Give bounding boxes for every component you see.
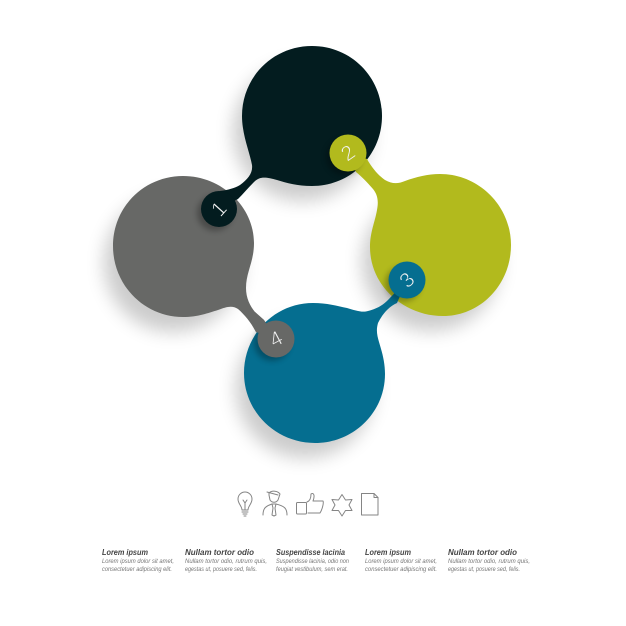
text block 3: Suspendisse lacinia, odio non [276, 559, 350, 565]
text block 4: Lorem ipsum [365, 548, 411, 557]
text block 4 [365, 548, 437, 573]
text block 5 [448, 548, 530, 573]
text block 5: Nullam tortor odio [448, 548, 517, 557]
text block 1: Lorem ipsum [102, 548, 148, 557]
panel: gray blob [113, 176, 276, 339]
small circle shadows [197, 139, 421, 361]
icon: star [332, 494, 352, 516]
text block 3: feugiat vestibulum, sem erat. [276, 567, 348, 573]
icon: person [263, 491, 287, 516]
text block 1: consectetuer adipiscing elit. [102, 567, 172, 573]
text block 5: Nullam tortor odio, rutrum quis, [448, 559, 530, 565]
text block 2 [185, 548, 267, 573]
node 2 [330, 134, 366, 172]
text block 2: Nullam tortor odio, rutrum quis, [185, 559, 267, 565]
panel: blue blob [244, 280, 407, 443]
text block 1 [102, 548, 174, 573]
node 3 [388, 262, 426, 298]
text block 2: egestas ut, posuere sed, felis. [185, 567, 257, 573]
text block 5: egestas ut, posuere sed, felis. [448, 567, 520, 573]
node 2: 2 [337, 141, 360, 166]
text block 4: consectetuer adipiscing elit. [365, 567, 437, 573]
icon: light bulb [238, 492, 252, 516]
text block 3 [276, 548, 350, 573]
icon: document [362, 494, 378, 515]
node 1 [201, 191, 237, 227]
node 3: 3 [395, 268, 420, 293]
panel: green blob [348, 153, 511, 316]
text block 4: Lorem ipsum dolor sit amet, [365, 559, 437, 565]
icon: thumbs up [296, 493, 323, 514]
node 4: 4 [266, 326, 287, 352]
node 4 [248, 312, 294, 358]
node 1: 1 [207, 197, 232, 221]
panel: dark blob [219, 46, 382, 209]
text block 2: Nullam tortor odio [185, 548, 254, 557]
drop shadows of the four blobs [104, 63, 500, 458]
text block 1: Lorem ipsum dolor sit amet, [102, 559, 174, 565]
text block 3: Suspendisse lacinia [276, 548, 345, 557]
